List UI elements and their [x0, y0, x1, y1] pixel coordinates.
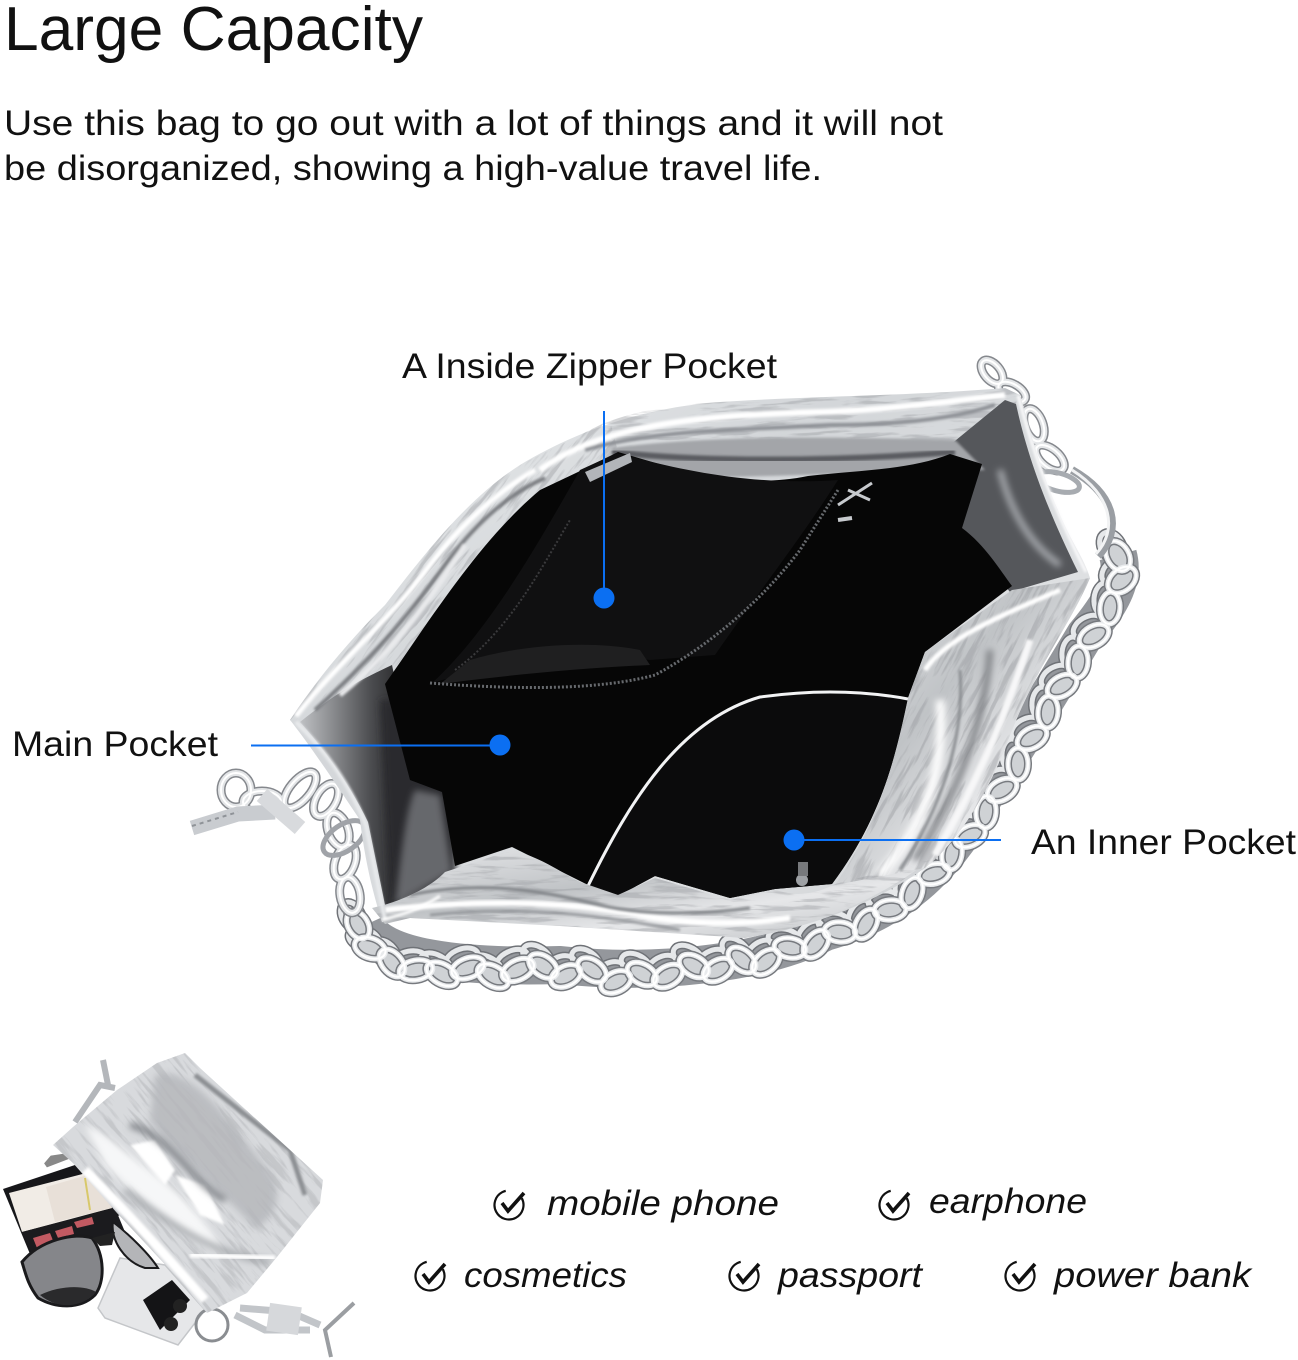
- item: mobile phone: [489, 1184, 779, 1225]
- item: earphone: [874, 1182, 1087, 1225]
- pocket snap: [796, 862, 808, 886]
- item: earphone: earphone: [929, 1182, 1087, 1221]
- item list: [410, 1182, 1253, 1296]
- zipper pull: [838, 483, 872, 520]
- strap tab: [192, 812, 275, 828]
- callout: zipper pocket: A Inside Zipper Pocket: [402, 347, 777, 386]
- callout: inner pocket: [784, 823, 1296, 862]
- makeup palette: [22, 1208, 125, 1254]
- silver outer shell: [290, 388, 1090, 938]
- inner lining shading: [300, 665, 420, 905]
- left rim crinkle texture: [290, 424, 616, 720]
- intro text: be disorganized, showing a high-value travel life.: [4, 149, 822, 188]
- brand tag: [585, 453, 632, 482]
- phone: [98, 1258, 205, 1345]
- intro text: Use this bag to go out with a lot of things and it will not: [4, 104, 943, 143]
- intro text: [4, 104, 943, 188]
- item: passport: [724, 1256, 923, 1296]
- right wall of bag: [835, 578, 1090, 885]
- zipper: [430, 490, 838, 688]
- small chains: [75, 1060, 115, 1122]
- lip crinkle texture: [376, 856, 928, 936]
- callout: zipper pocket: [402, 347, 777, 608]
- item: passport: passport: [777, 1256, 923, 1295]
- small bag with contents photo: [3, 1053, 356, 1358]
- inner pocket with white piping: [588, 692, 908, 898]
- black interior: [385, 452, 1012, 898]
- zipper pocket fabric: [432, 453, 838, 683]
- main bag photo: [22, 356, 1140, 1306]
- item: power bank: power bank: [1053, 1256, 1253, 1295]
- rings at top right: [1072, 470, 1112, 556]
- item: mobile phone: mobile phone: [547, 1184, 779, 1223]
- top rim crinkle texture: [605, 388, 1016, 440]
- callout: inner pocket: An Inner Pocket: [1031, 823, 1296, 862]
- upper rim highlights: [296, 395, 1086, 920]
- right wall crinkle texture: [842, 578, 1088, 884]
- callout: main pocket: Main Pocket: [12, 725, 218, 764]
- chain strap: [192, 356, 1141, 998]
- small bag body: [53, 1053, 323, 1313]
- front wall of bag (bottom): [372, 850, 932, 938]
- callout: main pocket: [12, 725, 510, 764]
- item: cosmetics: cosmetics: [464, 1256, 627, 1295]
- magazine and tube: [3, 1165, 120, 1254]
- sunglasses: [22, 1236, 102, 1306]
